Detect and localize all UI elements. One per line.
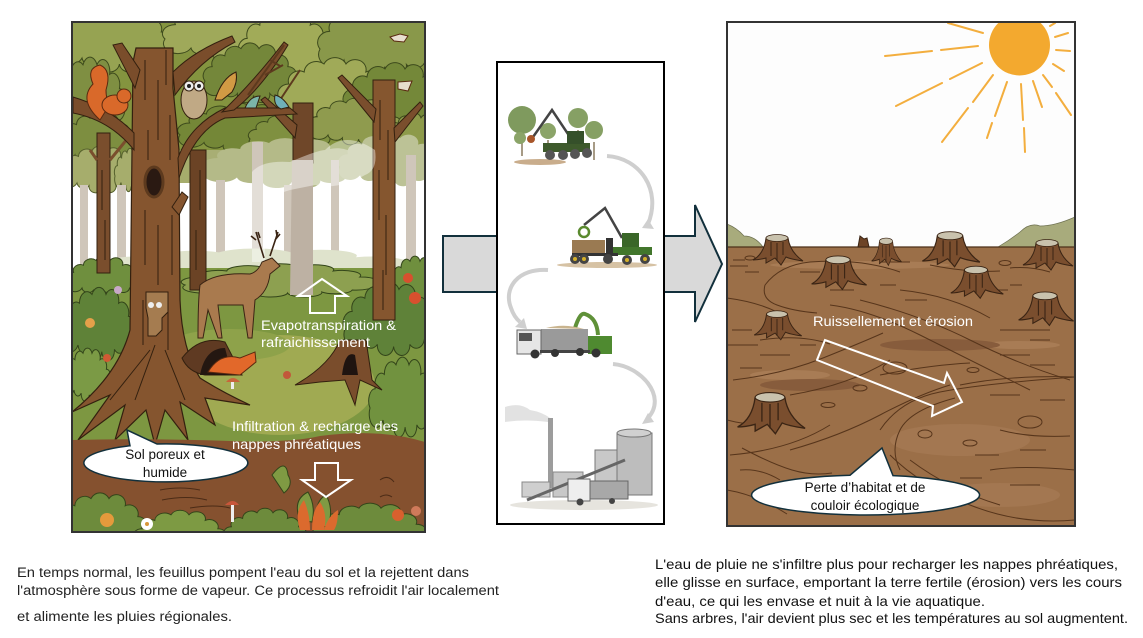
forwarder with logs	[557, 208, 657, 268]
text block: normal situation: En temps normal, les feuillus pompent l'eau du sol et la rejettent dans	[17, 565, 469, 580]
callout: sol poreux: Sol poreux et	[125, 447, 205, 462]
tree hollow	[145, 167, 163, 197]
panel: clear-cut land	[727, 14, 1075, 526]
sun rays	[885, 23, 1071, 152]
distant bushes	[727, 224, 763, 247]
text block: consequences: d'eau, ce qui les envase et nuit à la vie aquatique.	[655, 593, 985, 609]
callout: sol poreux: humide	[143, 465, 187, 480]
text block: normal situation: l'atmosphère sous forme de vapeur. Ce processus refroidit l'air localement	[17, 583, 499, 598]
panel border	[72, 22, 425, 532]
harvester felling trees	[508, 106, 603, 165]
pale back canopy and trees	[73, 134, 424, 268]
erosion rills	[727, 256, 1075, 521]
birds	[215, 34, 412, 109]
text block: consequences: elle glisse en surface, emportant la terre fertile (érosion) vers les cours	[655, 574, 1122, 590]
bark lines of right tree	[102, 100, 388, 310]
deer	[198, 230, 280, 338]
ground	[63, 256, 441, 443]
curved arrow 2	[509, 270, 548, 329]
callout: perte d'habitat	[752, 448, 980, 515]
text block: consequences	[655, 556, 1128, 626]
tree stumps	[738, 232, 1074, 434]
bottom foliage	[73, 466, 424, 531]
arrow: transition between panels	[443, 205, 722, 322]
chip truck loading	[517, 314, 612, 358]
tree creature	[146, 292, 168, 336]
biomass plant	[505, 405, 658, 510]
runoff arrow	[817, 340, 962, 416]
label: infiltration: nappes phréatiques	[232, 436, 361, 452]
curved arrow 1	[607, 156, 654, 229]
sun	[989, 23, 1050, 76]
callout: perte d'habitat: couloir écologique	[811, 498, 919, 513]
mushroom and flowers	[85, 273, 421, 389]
soil layer	[72, 433, 425, 532]
label: infiltration	[232, 418, 398, 452]
callout: perte d'habitat: Perte d’habitat et de	[805, 480, 925, 495]
text block: consequences: L'eau de pluie ne s'infiltre plus pour recharger les nappes phréatiques,	[655, 556, 1118, 572]
down arrow infiltration	[302, 463, 351, 497]
label: evapotranspiration	[261, 317, 397, 350]
thin branches upper centre	[248, 45, 300, 100]
label: evapotranspiration: Evapotranspiration &	[261, 317, 397, 333]
misty trunk	[290, 160, 313, 295]
back trees	[90, 75, 423, 320]
mist of evapotranspiration	[252, 140, 376, 262]
canopy	[73, 23, 424, 183]
label: infiltration: Infiltration & recharge des	[232, 418, 398, 434]
text block: normal situation: et alimente les pluies régionales.	[17, 609, 232, 624]
panel: forestry chain	[497, 62, 664, 524]
curved arrow 3	[613, 364, 655, 424]
label: evapotranspiration: rafraichissement	[261, 334, 370, 350]
panel border	[727, 22, 1075, 526]
fox burrow	[182, 340, 256, 375]
text block: normal situation	[17, 565, 499, 624]
main tree	[72, 36, 297, 445]
squirrel	[87, 65, 131, 120]
callout: sol poreux	[84, 430, 248, 482]
label: ruissellement: Ruissellement et érosion	[813, 313, 973, 329]
label: up arrow evapotranspiration	[298, 279, 347, 313]
eroded soil	[727, 247, 1075, 526]
small stump with hole	[295, 340, 382, 405]
text block: consequences: Sans arbres, l'air devient plus sec et les températures au sol augmentent.	[655, 610, 1128, 626]
owl	[181, 81, 207, 119]
panel: healthy forest illustration	[71, 21, 426, 533]
